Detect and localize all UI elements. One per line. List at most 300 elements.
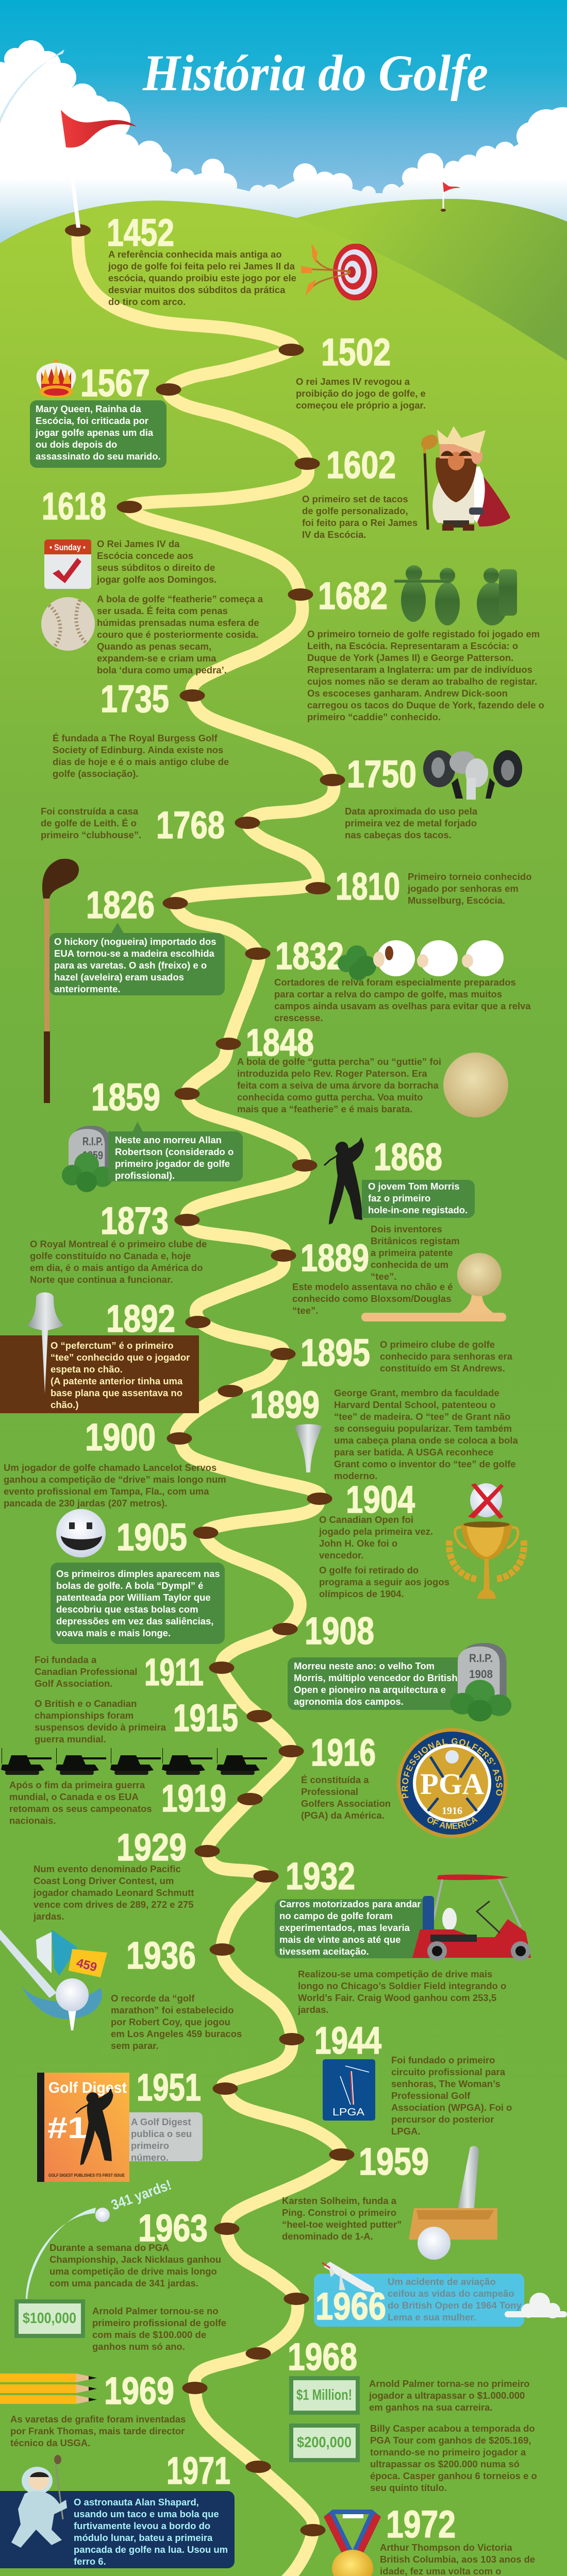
event 1859 bbox=[62, 1076, 243, 1192]
text 1900: Um jogador de golfe chamado Lancelot Servos bbox=[4, 1462, 216, 1473]
event 1567 bbox=[30, 360, 166, 468]
text 1929: jardas. bbox=[33, 1911, 64, 1922]
text 1969: As varetas de grafite foram inventadas bbox=[10, 2414, 186, 2425]
text 1873: golfe constituído no Canada e, hoje bbox=[30, 1250, 191, 1261]
callout 1868: faz o primeiro bbox=[368, 1193, 430, 1204]
event 1936 bbox=[0, 1929, 506, 2051]
event 1915 bbox=[1, 1697, 267, 1775]
year 1963: 1963 bbox=[138, 2207, 208, 2249]
event 1873 bbox=[30, 1199, 207, 1285]
text 1936 right: jardas. bbox=[297, 2004, 329, 2015]
event 1618 bbox=[41, 485, 263, 675]
icon: Golf Digest magazine: #1 bbox=[47, 2111, 88, 2145]
text 1502: proibição do jogo de golfe, e bbox=[296, 388, 426, 399]
clouds bbox=[0, 40, 567, 252]
year 1936: 1936 bbox=[126, 1934, 196, 1977]
callout 1908: agronomia dos campos. bbox=[294, 1696, 404, 1707]
year 1904: 1904 bbox=[346, 1478, 415, 1521]
callout 1567: ou dois depois do bbox=[36, 439, 117, 450]
callout 1908: Open e pioneiro na arquitectura e bbox=[294, 1684, 446, 1695]
event 1916 bbox=[301, 1728, 507, 1838]
text 1682: O primeiro torneio de golfe registado foi jogado em bbox=[307, 629, 540, 639]
drive arc 341 yards bbox=[26, 2177, 174, 2299]
text 1936 left: por Robert Coy, que jogou bbox=[111, 2016, 230, 2027]
event 1832 bbox=[274, 935, 531, 1023]
brown soil panel: (A patente anterior tinha uma bbox=[51, 1376, 183, 1386]
year 1832: 1832 bbox=[275, 935, 344, 977]
callout 1567: jogar golfe apenas um dia bbox=[35, 427, 154, 438]
callout 1905: patenteada por William Taylor que bbox=[56, 1592, 211, 1603]
event 1908 bbox=[288, 1609, 511, 1721]
text 1848: mais que a “featherie” e é mais barata. bbox=[237, 1104, 412, 1114]
text 1889 a: a primeira patente bbox=[371, 1247, 453, 1258]
event 1899 bbox=[250, 1383, 518, 1481]
event 1963 bbox=[14, 2177, 226, 2352]
callout 1951: primeiro bbox=[131, 2140, 169, 2151]
icon: caddie silhouettes bbox=[394, 565, 517, 625]
callout 1567: Escócia, foi criticada por bbox=[36, 415, 148, 426]
year 1959: 1959 bbox=[359, 2140, 429, 2183]
text 1889 b: conhecido como Bloxsom/Douglas bbox=[292, 1293, 451, 1304]
text 1502: começou ele próprio a jogar. bbox=[296, 400, 426, 411]
text 1618: jogar golfe aos Domingos. bbox=[96, 574, 216, 585]
icon: PGA logo: OF AMERICA bbox=[427, 1817, 478, 1829]
callout 1567 bbox=[30, 400, 166, 468]
event 1892 bbox=[0, 1292, 199, 1413]
text 1916: (PGA) da América. bbox=[301, 1810, 385, 1821]
icon: golfer silhouette bbox=[324, 1137, 364, 1225]
callout 1905: Os primeiros dimples aparecem nas bbox=[56, 1568, 220, 1579]
year 1848: 1848 bbox=[246, 1021, 314, 1064]
year 1895: 1895 bbox=[301, 1331, 370, 1374]
callout 1932: experimentados, mas levaria bbox=[279, 1922, 410, 1933]
event 1966 bbox=[314, 2262, 567, 2328]
icon: featherie ball bbox=[41, 597, 95, 651]
callout 1567: assassinato do seu marido. bbox=[36, 451, 161, 462]
icon: golf club, flags and ball: 459 bbox=[75, 1956, 98, 1975]
text 1915: championships foram bbox=[35, 1710, 134, 1721]
text 1968 b: PGA Tour com ganhos de $205.169, bbox=[370, 2435, 531, 2446]
icon: golf cart bbox=[412, 1874, 531, 1961]
text 1944: Professional Golf bbox=[391, 2090, 471, 2101]
icon: wooden club bbox=[42, 859, 79, 1103]
event 1889 bbox=[292, 1224, 506, 1321]
text 1963 Palmer: com mais de $100.000 de bbox=[92, 2329, 206, 2340]
text 1944: percursor do posterior bbox=[391, 2114, 494, 2125]
text 1911: Foi fundada a bbox=[35, 1654, 97, 1665]
callout 1868: O jovem Tom Morris bbox=[368, 1181, 460, 1192]
navy panel 1971 bbox=[0, 2491, 235, 2568]
event 1969 bbox=[0, 2369, 186, 2448]
text 1911: Canadian Professional bbox=[35, 1666, 137, 1677]
text 1848: A bola de golfe “gutta percha” ou “guttie” foi bbox=[237, 1056, 441, 1067]
text 1936 left: marathon” foi estabelecido bbox=[111, 2005, 234, 2015]
start flag and hole bbox=[61, 110, 137, 236]
icon: putter and ball bbox=[409, 2146, 497, 2260]
text 1929: Num evento denominado Pacific bbox=[34, 1863, 181, 1874]
text 1915: suspensos devido à primeira bbox=[35, 1722, 166, 1733]
brown soil panel: “tee” conhecido que o jogador bbox=[51, 1352, 190, 1363]
text 1959: denominado de 1-A. bbox=[282, 2231, 373, 2242]
event 1768 bbox=[41, 804, 225, 846]
icon: iron club heads bbox=[423, 750, 522, 800]
year 1826: 1826 bbox=[86, 884, 155, 926]
event 1750 bbox=[345, 750, 522, 840]
text 1963: Championship, Jack Nicklaus ganhou bbox=[49, 2254, 221, 2265]
event 1905 bbox=[51, 1509, 225, 1644]
event 1944 bbox=[314, 2019, 512, 2137]
callout 1905: depressões em vez das saliências, bbox=[56, 1616, 213, 1626]
callout 1932: mais de vinte anos até que bbox=[279, 1934, 401, 1945]
text 1915: guerra mundial. bbox=[35, 1734, 106, 1744]
text 1899: “tee” de madeira. O “tee” de Grant não bbox=[334, 1411, 510, 1422]
text 1904 b: programa a seguir aos jogos bbox=[319, 1577, 449, 1587]
text featherie: expandem-se e criam uma bbox=[97, 653, 216, 664]
text 1959: “heel-toe weighted putter” bbox=[282, 2219, 402, 2230]
text 1618: O Rei James IV da bbox=[97, 538, 180, 549]
year 1502: 1502 bbox=[321, 331, 391, 374]
text 1682: Os escoceses ganharam. Andrew Dick-soon bbox=[307, 688, 508, 699]
event 1919 bbox=[9, 1777, 226, 1826]
navy panel 1971: furtivamente levou a bordo do bbox=[74, 2520, 210, 2531]
text 1904 a: John H. Oke foi o bbox=[319, 1538, 397, 1549]
event 1848 bbox=[237, 1021, 508, 1117]
event 1951 bbox=[37, 2066, 203, 2182]
text 1848: feita com a seiva de uma árvore da borracha bbox=[237, 1080, 439, 1091]
year 1971: 1971 bbox=[166, 2449, 230, 2492]
year 1908: 1908 bbox=[305, 1609, 374, 1652]
callout 1932 bbox=[275, 1899, 433, 1958]
callout 1826: O hickory (nogueira) importado dos bbox=[54, 936, 216, 947]
text 1602: de golfe personalizado, bbox=[302, 505, 408, 516]
text 1810: jogado por senhoras em bbox=[407, 883, 519, 894]
brown soil panel: chão.) bbox=[51, 1399, 78, 1410]
year 1889: 1889 bbox=[301, 1236, 369, 1279]
text 1904 b: O golfe foi retirado do bbox=[319, 1565, 419, 1575]
event 1929 bbox=[33, 1826, 194, 1922]
text 1889 a: Britânicos registam bbox=[371, 1235, 460, 1246]
icon: astronaut bbox=[11, 2455, 67, 2548]
year 1810: 1810 bbox=[336, 865, 400, 908]
callout 1908 bbox=[288, 1657, 466, 1710]
year 1905: 1905 bbox=[116, 1516, 187, 1558]
navy panel 1971: ferro 6. bbox=[74, 2556, 106, 2567]
callout 1905 bbox=[51, 1563, 225, 1644]
text 1919: Após o fim da primeira guerra bbox=[9, 1780, 145, 1790]
icon: Golf Digest magazine: Golf Digest bbox=[48, 2079, 127, 2096]
sky background bbox=[0, 0, 567, 247]
text 1452: A referência conhecida mais antiga ao bbox=[108, 249, 282, 260]
text 1502: O rei James IV revogou a bbox=[296, 376, 410, 387]
text 1968 b: época. Casper ganhou 6 torneios e o bbox=[370, 2470, 537, 2481]
text 1963 Palmer: primeiro profissional de golfe bbox=[92, 2317, 226, 2328]
text featherie: couro que é posteriormente cosida. bbox=[97, 629, 259, 640]
brown soil panel: base plana que assentava no bbox=[51, 1387, 182, 1398]
icon: tombstone bbox=[62, 1126, 113, 1192]
text 1929: jogador chamado Leonard Schmutt bbox=[33, 1887, 194, 1898]
text 1810: Musselburg, Escócia. bbox=[408, 895, 505, 906]
icon: calendar Sunday bbox=[44, 539, 91, 589]
icon: $200,000 bill bbox=[289, 2424, 360, 2462]
text 1895: O primeiro clube de golfe bbox=[380, 1339, 495, 1350]
event 1826 bbox=[42, 859, 225, 1103]
text 1944: LPGA. bbox=[391, 2126, 421, 2137]
event 1900 bbox=[4, 1416, 226, 1509]
text 1682: Leith, na Escócia. Representaram a Escócia: o bbox=[307, 640, 518, 651]
drive arc 341 yards: 341 yards! bbox=[109, 2177, 174, 2213]
text 1904 a: O Canadian Open foi bbox=[319, 1514, 413, 1525]
text 1750: primeira vez de metal forjado bbox=[345, 818, 477, 828]
icon: Golf Digest magazine: GOLF DIGEST PUBLISHES ITS FIRST ISSUE bbox=[48, 2173, 125, 2178]
text 1968 a: Arnold Palmer torna-se no primeiro bbox=[369, 2378, 529, 2389]
year 1735: 1735 bbox=[101, 677, 169, 720]
text 1936 left: sem parar. bbox=[111, 2040, 159, 2051]
text 1929: vence com drives de 289, 272 e 275 bbox=[34, 1899, 194, 1910]
text 1899: moderno. bbox=[334, 1470, 377, 1481]
text 1963: uma competição de drive mais longo bbox=[49, 2266, 217, 2277]
year 1899: 1899 bbox=[250, 1383, 320, 1426]
text 1810: Primeiro torneio conhecido bbox=[408, 871, 532, 882]
icon: trophy bbox=[449, 1521, 524, 1599]
icon: ball on flat tee bbox=[361, 1253, 506, 1321]
icon: tombstone: 1859 bbox=[82, 1149, 103, 1162]
text 1968 a: jogador a ultrapassar o $1.000.000 bbox=[369, 2390, 525, 2401]
text 1972: Arthur Thompson do Victoria bbox=[380, 2542, 512, 2553]
text 1899: uma cabeça plana onde se coloca a bola bbox=[334, 1435, 518, 1446]
year 1859: 1859 bbox=[91, 1076, 160, 1118]
text 1936 right: Realizou-se uma competição de drive mais bbox=[298, 1969, 492, 1979]
navy panel 1971: usando um taco e uma bola que bbox=[74, 2509, 219, 2519]
year 1972: 1972 bbox=[386, 2503, 456, 2546]
year 1944: 1944 bbox=[314, 2019, 381, 2062]
shot trail bbox=[0, 49, 64, 124]
text 1452: jogo de golfe foi feita pelo rei James II da bbox=[108, 261, 295, 272]
text 1873: em dia, é o mais antigo da América do bbox=[30, 1262, 203, 1273]
text 1452: do tiro com arco. bbox=[108, 296, 186, 307]
callout 1859: primeiro jogador de golfe bbox=[115, 1158, 230, 1169]
text 1750: Data aproximada do uso pela bbox=[345, 806, 478, 817]
text featherie: A bola de golfe “featherie” começa a bbox=[97, 594, 263, 604]
icon: $100,000 bill bbox=[14, 2299, 85, 2338]
year 1452: 1452 bbox=[107, 211, 174, 254]
year 1682: 1682 bbox=[318, 574, 388, 617]
callout 1859: Neste ano morreu Allan bbox=[115, 1134, 222, 1145]
callout 1908: Morreu neste ano: o velho Tom bbox=[294, 1660, 435, 1671]
callout 1951: publica o seu bbox=[131, 2128, 192, 2139]
icon: crown bbox=[37, 360, 76, 398]
callout 1567: Mary Queen, Rainha da bbox=[36, 403, 141, 414]
text 1966: ceifou as vidas do campeão bbox=[388, 2288, 514, 2299]
event 1972 bbox=[324, 2503, 535, 2576]
event 1932 bbox=[275, 1855, 531, 1961]
brown soil panel: espeta no chão. bbox=[51, 1364, 123, 1375]
event 1602 bbox=[302, 426, 510, 540]
icon: Golf Digest magazine bbox=[37, 2073, 129, 2182]
event 1911 bbox=[35, 1651, 204, 1693]
text 1735: Society of Edinburg. Ainda existe nos bbox=[53, 744, 223, 755]
icon: tombstone: R.I.P. bbox=[82, 1135, 103, 1148]
text 1944: Foi fundado o primeiro bbox=[391, 2055, 495, 2065]
event 1968 bbox=[288, 2335, 537, 2493]
text 1900: evento profissional em Tampa, Fla., com uma bbox=[4, 1486, 209, 1497]
text 1963: Durante a semana do PGA bbox=[49, 2242, 169, 2253]
icon: tombstone 1908: R.I.P. bbox=[469, 1652, 493, 1665]
text 1944: circuito profissional para bbox=[391, 2066, 506, 2077]
icon: tombstone 1908: 1908 bbox=[469, 1668, 493, 1681]
text 1963 Palmer: ganhos num só ano. bbox=[92, 2341, 185, 2352]
text 1899: se conseguiu popularizar. Tem também bbox=[334, 1423, 512, 1434]
text 1919: nacionais. bbox=[9, 1815, 56, 1826]
brown soil panel bbox=[0, 1335, 199, 1413]
year 1916: 1916 bbox=[311, 1731, 376, 1774]
icon: LPGA logo bbox=[323, 2059, 375, 2121]
text 1682: carregou os tacos do Duque de York, fazendo dele o bbox=[307, 700, 544, 710]
year 1567: 1567 bbox=[80, 362, 150, 404]
icon: $1 million bill bbox=[289, 2376, 360, 2415]
year 1602: 1602 bbox=[326, 444, 396, 486]
year 1915: 1915 bbox=[173, 1697, 238, 1739]
blue sky panel bbox=[314, 2274, 524, 2327]
text featherie: ser usada. É feita com penas bbox=[97, 605, 228, 616]
icon: plane bbox=[322, 2262, 375, 2293]
icon: target with arrows bbox=[301, 243, 377, 300]
event 1810 bbox=[336, 865, 532, 908]
callout 1868: hole-in-one registado. bbox=[368, 1205, 468, 1215]
text 1968 b: ultrapassar os $200.000 numa só bbox=[370, 2459, 520, 2469]
callout 1932: Carros motorizados para andar bbox=[279, 1899, 421, 1909]
event 1971 bbox=[0, 2449, 235, 2576]
callout 1951 bbox=[129, 2112, 203, 2163]
text 1899: George Grant, membro da faculdade bbox=[334, 1387, 499, 1398]
text 1904 b: olímpicos de 1904. bbox=[319, 1588, 404, 1599]
text 1832: crescesse. bbox=[274, 1012, 323, 1023]
text 1968 a: em ganhos na sua carreira. bbox=[369, 2402, 493, 2413]
text 1452: desviar muitos dos súbditos da prática bbox=[108, 284, 286, 295]
event 1904 bbox=[319, 1478, 524, 1599]
year 1618: 1618 bbox=[42, 485, 106, 528]
text 1832: Cortadores de relva foram especialmente preparados bbox=[274, 977, 516, 988]
callout 1951: A Golf Digest bbox=[131, 2116, 191, 2127]
text 1602: O primeiro set de tacos bbox=[302, 494, 408, 504]
navy panel 1971: O astronauta Alan Shapard, bbox=[74, 2497, 199, 2507]
year 1873: 1873 bbox=[101, 1199, 169, 1242]
text 1899: para ser batida. A USGA reconhece bbox=[334, 1447, 493, 1458]
text 1452: escócia, quando proibiu este jogo por ele bbox=[108, 273, 296, 283]
text 1959: Karsten Solheim, funda a bbox=[282, 2195, 397, 2206]
year 1768: 1768 bbox=[156, 804, 225, 846]
icon: $100,000 bill: $100,000 bbox=[23, 2310, 76, 2327]
text 1848: conhecida como gutta percha. Voa muito bbox=[237, 1092, 423, 1103]
event 1682 bbox=[307, 565, 544, 722]
text 1966: Lema e sua mulher. bbox=[388, 2312, 476, 2323]
text 1889 a: “tee”. bbox=[371, 1271, 396, 1282]
text 1969: por Frank Thomas, mais tarde director bbox=[10, 2426, 185, 2436]
text 1682: cujos nomes não se deram ao trabalho de registar. bbox=[307, 676, 537, 687]
icon: PGA logo bbox=[397, 1728, 507, 1838]
text 1895: conhecido para senhoras era bbox=[380, 1351, 513, 1362]
icon: pin tee bbox=[27, 1292, 63, 1394]
text 1904 a: vencedor. bbox=[319, 1550, 363, 1561]
callout 1859: Robertson (considerado o bbox=[115, 1146, 234, 1157]
icon: bush and sheep bbox=[338, 940, 504, 980]
text 1966: do British Open de 1964 Tony bbox=[388, 2300, 522, 2311]
icon: LPGA logo: LPGA bbox=[332, 2107, 365, 2118]
callout 1826: anteriormente. bbox=[54, 984, 121, 994]
text featherie: Quando as penas secam, bbox=[97, 641, 211, 652]
text 1944: Association (WPGA). Foi o bbox=[391, 2102, 512, 2113]
text 1916: Professional bbox=[301, 1786, 358, 1797]
icon: gutta percha ball bbox=[443, 1053, 508, 1117]
text 1735: É fundada a The Royal Burgess Golf bbox=[53, 733, 218, 743]
icon: calendar Sunday: • Sunday • bbox=[49, 543, 86, 552]
event 1502 bbox=[296, 331, 426, 411]
text 1848: introduzida pelo Rev. Roger Paterson. Era bbox=[237, 1068, 427, 1079]
title: História do Golfe bbox=[142, 44, 488, 101]
year 1919: 1919 bbox=[161, 1777, 226, 1820]
distant flag bbox=[441, 182, 460, 212]
icon: pencils bbox=[0, 2374, 97, 2404]
text 1911: Golf Association. bbox=[35, 1678, 112, 1689]
icon: tombstone 1908 bbox=[450, 1643, 511, 1721]
year 1900: 1900 bbox=[85, 1416, 156, 1459]
callout 1826 bbox=[49, 923, 225, 995]
text 1768: Foi construída a casa bbox=[41, 806, 139, 817]
text 1735: golfe (associação). bbox=[53, 768, 139, 779]
text 1916: Golfers Association bbox=[301, 1798, 391, 1809]
year 1968: 1968 bbox=[288, 2335, 357, 2378]
icon: golf club, flags and ball bbox=[0, 1929, 107, 2030]
icon: small cloud bbox=[505, 2293, 567, 2318]
event 1868 bbox=[324, 1136, 475, 1225]
text 1682: Representaram a Inglaterra: um par de indivíduos bbox=[307, 664, 532, 675]
text 1966: Um acidente de aviação bbox=[388, 2276, 496, 2287]
text 1959: Ping. Constroi o primeiro bbox=[282, 2207, 396, 2218]
icon: wooden tee bbox=[295, 1424, 322, 1472]
text 1768: primeiro “clubhouse”. bbox=[41, 829, 141, 840]
text 1916: É constituída a bbox=[301, 1774, 369, 1785]
text 1873: O Royal Montreal é o primeiro clube de bbox=[30, 1239, 207, 1249]
year 1932: 1932 bbox=[286, 1855, 355, 1897]
text 1682: Duque de York (James II) e George Patterson. bbox=[307, 652, 513, 663]
text 1936 left: em Los Angeles 459 buracos bbox=[111, 2028, 242, 2039]
icon: $1 million bill: $1 Million! bbox=[296, 2387, 352, 2403]
text 1682: primeiro “caddie” conhecido. bbox=[307, 711, 441, 722]
icon: PGA logo: PGA bbox=[420, 1767, 484, 1801]
callout 1826: para as varetas. O ash (freixo) e o bbox=[54, 960, 207, 971]
text 1618: Escócia concede aos bbox=[97, 550, 193, 561]
year 1750: 1750 bbox=[347, 753, 416, 795]
callout 1859 bbox=[108, 1122, 243, 1181]
text 1618: seus súbditos o direito de bbox=[97, 562, 215, 573]
icon: row of tanks bbox=[1, 1748, 267, 1775]
text 1889 b: Este modelo assentava no chão e é bbox=[292, 1281, 453, 1292]
hill back right bbox=[296, 199, 567, 371]
text 1832: para cortar a relva do campo de golfe, mas muitos bbox=[274, 989, 502, 999]
year 1929: 1929 bbox=[116, 1826, 187, 1869]
text 1904 a: jogado pela primeira vez. bbox=[319, 1526, 433, 1537]
callout 1905: bolas de golfe. A bola “Dympl” é bbox=[56, 1580, 203, 1591]
icon: PGA logo: PROFESSIONAL GOLFERS' ASSOCIATION bbox=[402, 1738, 503, 1799]
text 1968 b: tornando-se no primeiro jogador a bbox=[370, 2447, 526, 2458]
timeline path bbox=[78, 230, 354, 2576]
callout 1908: Morris, múltiplo vencedor do British bbox=[294, 1672, 458, 1683]
text 1889 a: conhecida de um bbox=[371, 1259, 448, 1270]
text 1889 b: “tee”. bbox=[292, 1305, 318, 1316]
navy panel 1971: módulo lunar, bateu a primeira bbox=[74, 2532, 213, 2543]
text 1969: técnico da USGA. bbox=[10, 2437, 90, 2448]
callout 1859: profissional). bbox=[115, 1170, 175, 1181]
text 1919: mundial, o Canada e os EUA bbox=[9, 1791, 139, 1802]
